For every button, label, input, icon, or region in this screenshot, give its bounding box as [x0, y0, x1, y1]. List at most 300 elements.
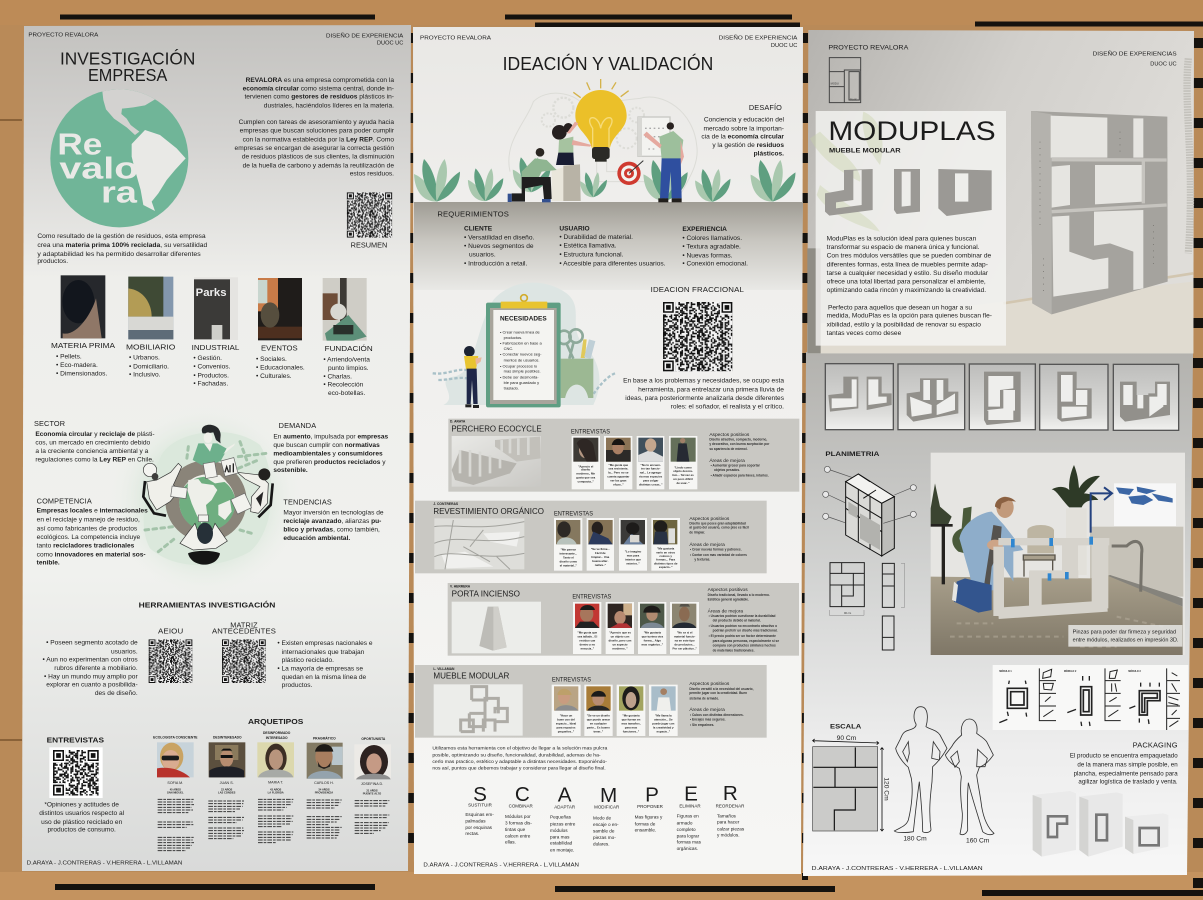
papers: [171, 458, 251, 522]
aspectos: Áreas de mejora: [689, 706, 725, 713]
labels and lists: • Inclusivo.: [129, 372, 161, 379]
globe: [179, 474, 235, 530]
labels and lists: • Pellets.: [56, 354, 82, 361]
demanda: que prefieren productos reciclados y: [273, 459, 386, 466]
M modificar: samble de: [593, 829, 615, 834]
assembly instructions: MÓDULO 1: [999, 670, 1012, 673]
card 2: [584, 685, 613, 736]
desafío: cia de la economía circular: [701, 134, 784, 141]
archetype: desinformado: [257, 731, 294, 843]
card 4: "Lindo como: [674, 465, 692, 469]
description: diferentes formas, esta línea de muebles permite adap-: [827, 261, 988, 268]
card 3: que fueran en: [622, 717, 641, 721]
header: DUOC UC: [771, 43, 797, 49]
furniture module: [998, 542, 1109, 616]
left findings: • Aun no experimentan con otros: [42, 656, 138, 663]
human silhouettes: 160 Cm: [966, 838, 990, 845]
QR resumen: RESUMEN: [351, 240, 387, 249]
card 1: buen uso del: [557, 717, 575, 721]
A adaptar: Pequeñas: [550, 815, 572, 820]
description: medida, ModuPlas es la opción para quienes buscan fle-: [827, 313, 992, 320]
card 2: moderno..": [612, 647, 628, 651]
card 4: "No se si el: [677, 631, 693, 635]
top section: [28, 32, 404, 265]
E eliminar: E: [684, 783, 698, 806]
AEIOU: AEIOU: [158, 626, 183, 635]
aspectos: [689, 681, 754, 727]
card 3: que tuviera otra: [642, 635, 663, 639]
aspectos: permite jugar con la creatividad. Buen: [689, 691, 747, 695]
planimetria heading: PLANIMETRIA: [825, 451, 880, 458]
C combinar: 3 formas dis-: [505, 821, 532, 826]
card 2: "Se ve firme...: [591, 547, 610, 551]
description: ofrece una total libertad para personalizar el ambiente,: [827, 279, 986, 286]
illustration: clipboard: traslado.: [504, 385, 519, 390]
result paragraph: y adaptabilidad les ha permitido desarrollar diferentes: [37, 251, 201, 258]
result paragraph: crea una materia prima 100% reciclada, su versatilidad: [37, 242, 208, 249]
card 3: [619, 518, 647, 571]
aspectos: su apariencia de mármol.: [709, 447, 748, 451]
card 4: distintos tipos de: [654, 561, 678, 565]
arrow to clip detail: [1091, 487, 1112, 533]
paragraph: cerlo mas practico, estético y adaptable a distintas necesidades. Exponiéndo-: [432, 759, 607, 765]
tendencias: Mayor inversión en tecnologías de: [283, 509, 384, 516]
aspectos: • Añadir espacios para llaves, intarios.: [711, 473, 769, 477]
panel: porta incienso: PORTA INCIENSO: [452, 590, 520, 599]
archetype: desinteresado: LAS CONDES: [218, 790, 236, 794]
leaves: [145, 442, 267, 552]
card 4: Por ser plástico..": [672, 647, 698, 651]
panel: revestimiento orgánico: [415, 501, 767, 573]
P proponer: PROPONER: [637, 804, 664, 809]
card 3: funciones..": [623, 729, 640, 733]
heading: HERRAMIENTAS INVESTIGACIÓN: [139, 600, 275, 609]
card 2: un aspecto: [612, 643, 628, 647]
card 1: residuo cae: [579, 639, 596, 643]
A adaptar: en montaje.: [550, 847, 574, 852]
result paragraph: Como resultado de la gestión de residuos, esta empresa: [37, 233, 206, 240]
labels and lists: • Urbanos.: [129, 354, 160, 361]
labels and lists: • Recolección: [323, 382, 364, 389]
archetype: desinteresado: JUAN S.: [220, 781, 234, 785]
scale and packaging: [812, 665, 1188, 872]
M modificar: encaje o en-: [593, 822, 619, 827]
thumbnail 3: [969, 364, 1035, 430]
ideacion fraccional: IDEACION FRACCIONAL: [651, 285, 744, 294]
entrevistas: productos de consumo.: [47, 827, 116, 834]
plants: [414, 157, 795, 202]
header: DISEÑO DE EXPERIENCIAS: [1093, 51, 1177, 58]
intro text: de la huella de carbono y además la reutilización de: [243, 162, 394, 169]
aspectos: Áreas de mejora: [709, 457, 745, 464]
M modificar: MODIFICAR: [594, 805, 620, 810]
card 1: diseño: [581, 468, 591, 472]
requerimientos: • Textura agradable.: [682, 244, 741, 251]
card 3: forma... Algo: [644, 639, 661, 643]
labels and lists: • Dimensionados.: [56, 371, 107, 378]
aspectos: Aspectos positivos: [709, 432, 750, 438]
packaging text: plancha, especialmente pensado para: [1074, 771, 1178, 778]
aspectos: de limpiar.: [689, 530, 705, 534]
intro text: economía circular como sistema central, donde in-: [243, 85, 394, 92]
card 3: nal... Le agrega-: [640, 471, 662, 475]
card 1: sea tallado.. El: [577, 635, 597, 639]
desafío: mercado sobre la importan-: [704, 125, 784, 132]
labels and lists: • Eco-madera.: [56, 362, 98, 369]
radiator pipe: [1112, 542, 1142, 592]
R reordenar: calzar piezas: [717, 826, 745, 831]
E eliminar: ELIMINAR: [679, 804, 701, 809]
white info panel: [810, 111, 1006, 346]
chair: [1023, 525, 1055, 578]
matriz antecedentes: [212, 620, 276, 683]
aspectos: • Sin empalmes.: [690, 723, 714, 727]
photo: eventos: [258, 278, 302, 340]
card 2: buena alter-: [592, 559, 608, 563]
intro text: tervienen como gestores de residuos plásticos in-: [244, 94, 394, 101]
card 3: mas tamaños,: [621, 721, 641, 725]
C combinar: [505, 783, 534, 845]
archetype: desinformado: MARIA T.: [268, 781, 283, 785]
card 2: tener..": [593, 729, 604, 733]
ideacion fraccional: roles: el soñador, el realista y el crítico.: [671, 403, 784, 410]
aspectos: sistema de armado.: [689, 696, 719, 700]
illustration: clipboard: • Ocupar procesos lo: [500, 363, 538, 368]
card 4: [651, 518, 680, 571]
card 3: interior que: [625, 558, 641, 562]
labels and lists: MATERIA PRIMA: [51, 341, 115, 350]
card 2: [606, 602, 634, 654]
R reordenar: y módulos.: [717, 833, 740, 838]
competencia: así como fabricantes de productos: [37, 525, 138, 532]
description: Con tres módulos versátiles que se pueden combinar de: [827, 253, 992, 260]
card 2: [604, 436, 632, 489]
P proponer: formas de: [635, 821, 656, 826]
labels and lists: • Arriendo/venta: [323, 356, 370, 363]
description: optimizando cada rincón y maximizando la creatividad.: [827, 287, 986, 294]
aspectos: Aspectos positivos: [689, 516, 730, 522]
card 2: la... Pero no se: [608, 471, 629, 475]
panel: revestimiento orgánico: J. CONTRERAS: [433, 502, 459, 506]
sector: [34, 419, 155, 464]
photo: assembling the module: [931, 453, 1185, 655]
aspectos: del producto debido al material.: [713, 619, 761, 623]
packaging text: El producto se encuentra empaquetado: [1070, 753, 1178, 760]
person top: [193, 425, 235, 465]
archetype: desinformado: LA FLORIDA: [268, 790, 284, 794]
card 2: diseño, pero con: [609, 639, 632, 643]
illustration: clipboard: mas simple posibles.: [504, 369, 541, 374]
aspectos: compara con productos similares hechos: [713, 644, 776, 648]
logo: Revalora globe: Re: [57, 127, 102, 161]
tendencias: [283, 498, 384, 542]
ideacion fraccional: herramienta, para entrelazar una primera lluvia de: [638, 386, 784, 393]
card 3: "Me gustaría: [622, 713, 640, 717]
human silhouettes: 180 Cm: [903, 835, 927, 842]
card 1: [572, 436, 600, 489]
panel: porta incienso: [448, 583, 799, 656]
E eliminar: [677, 783, 702, 851]
labels and lists: • Convenios.: [193, 364, 231, 371]
card 1: pequeños..": [558, 729, 575, 733]
archetype: desinformado: 43 AÑOS: [270, 786, 282, 791]
card 3: ría mas espacios: [639, 475, 663, 479]
man at board: [643, 122, 684, 202]
card 1: gusta que sea: [576, 476, 596, 480]
demanda: En aumento, impulsada por empresas: [273, 433, 389, 440]
archetype: desinteresado: 22 AÑOS: [221, 786, 233, 791]
aspectos: Aspectos positivos: [689, 681, 730, 687]
card 2: "Me gusta que: [609, 463, 629, 467]
right findings: [277, 640, 373, 689]
card 3: "Lo imagino: [625, 550, 642, 554]
thumbnail 4: [1040, 364, 1108, 430]
labels and lists: EVENTOS: [261, 343, 298, 352]
panel: porta incienso: ENTREVISTAS: [572, 595, 611, 601]
left findings: explorar en cuanto a posibilida-: [46, 682, 138, 689]
right findings: internacionales que trabajan: [282, 649, 365, 656]
photo: [434, 518, 524, 569]
hero photo section: [807, 30, 1194, 353]
labels and lists: • Educacionales.: [256, 365, 305, 372]
competencia: tenible.: [37, 559, 60, 566]
caption: Pinzas para poder dar firmeza y seguridad: [1073, 630, 1176, 636]
requerimientos: EXPERIENCIA: [682, 226, 727, 233]
archetype: oportunista: [354, 737, 391, 833]
paragraph: Utilizamos esta herramienta con el objetivo de llegar a la solución mas pulcra: [432, 745, 608, 751]
desafío: [701, 103, 785, 158]
photo: [452, 602, 541, 653]
intro text: de residuos plásticos de sus clientes, la disminución: [242, 154, 394, 161]
card 4: objeto decora-: [673, 469, 693, 473]
aspectos: [709, 432, 770, 477]
requerimientos: • Colores llamativos.: [682, 235, 742, 242]
intro text: empresas que buscan soluciones para poder cumplir: [240, 128, 395, 135]
header left: PROYECTO REVALORA: [28, 33, 99, 39]
right findings: • La mayoría de empresas se: [277, 665, 363, 672]
AEIOU: [149, 626, 192, 683]
card 1: Tanto el: [563, 555, 574, 559]
right findings: productos.: [282, 682, 313, 689]
caption: [1068, 625, 1182, 647]
person right: [237, 468, 273, 517]
labels and lists: • Sociales.: [256, 356, 287, 363]
ideacion fraccional: En base a los problemas y necesidades, se ocupo esta: [623, 378, 784, 385]
panel: porta incienso: V. HERRERA: [450, 584, 471, 588]
card 4: puede jugar con: [652, 721, 675, 725]
aspectos: Diseño versátil a la necesidad del usuario,: [689, 687, 754, 691]
escala: 90 Cm: [837, 735, 857, 742]
R reordenar: REORDENAR: [716, 804, 745, 809]
archetype: pragmático: PRAGMÁTICO: [313, 735, 336, 740]
photo: mobiliario: [128, 277, 173, 339]
console: [552, 164, 581, 201]
labels and lists: FUNDACIÓN: [325, 344, 373, 353]
illustration: team and light bulb: [414, 79, 795, 202]
blue clips: [1011, 537, 1093, 581]
card 3: mas para: [627, 554, 640, 558]
archetype: ecologista: SAN MIGUEL: [167, 790, 184, 794]
white info panel: MUEBLE MODULAR: [829, 148, 902, 154]
card 4: formas... Para: [656, 558, 676, 562]
left findings: rubros diferente a mobiliario.: [54, 665, 138, 672]
header: DUOC UC: [1150, 62, 1177, 68]
header: PROYECTO REVALORA: [420, 36, 491, 42]
requerimientos: USUARIO: [559, 225, 590, 232]
card 2: nativa..": [595, 563, 607, 567]
intro text: [235, 77, 395, 178]
card 2: "Aprecio que es: [609, 631, 631, 635]
aspectos: de materiales tradicionales.: [713, 648, 755, 652]
A adaptar: para mas: [550, 835, 570, 840]
card 3: [617, 685, 645, 736]
labels and lists: • Productos.: [193, 372, 229, 379]
card 4: atención... Se: [654, 717, 673, 721]
photo: materia prima: [61, 275, 105, 338]
card 2: que puedo armar: [587, 717, 611, 721]
thumbnail 5: [1113, 364, 1179, 430]
arquetipos heading: ARQUETIPOS: [248, 717, 303, 726]
illustration: clipboard: • Conectar nuevos seg-: [500, 352, 542, 357]
card 1: "Me parece: [561, 548, 576, 552]
card 4: na en este tipo: [675, 639, 695, 643]
P proponer: Mas figuras y: [635, 815, 663, 820]
packaging text: [1070, 741, 1178, 785]
card 4: "Me gustaría: [657, 547, 675, 551]
card 2: cuenta aguantar: [607, 475, 630, 479]
demanda: DEMANDA: [279, 421, 316, 430]
left findings: • Hay un mundo muy amplio por: [44, 673, 138, 680]
archetype: desinformado: DESINFORMADO: [263, 731, 291, 735]
archetype: pragmático: 34 AÑOS: [318, 786, 330, 791]
configurations and planimetry: [823, 364, 1179, 650]
title: INVESTIGACIÓN: [60, 49, 195, 69]
card 3: [637, 436, 664, 489]
aspectos: • Aumentar grosor para soportar: [711, 464, 761, 468]
description: transformar su espacio de manera única y funcional.: [827, 244, 980, 251]
poster 1: investigación empresa: [22, 25, 411, 871]
requerimientos: CLIENTE: [464, 226, 493, 233]
R reordenar: para hacer: [717, 820, 740, 825]
plan views: [829, 563, 905, 650]
card 1: [554, 518, 582, 571]
competencia: [37, 496, 148, 566]
shelf render: [1031, 111, 1168, 314]
requerimientos: • Accesible para diferentes usuarios.: [559, 260, 666, 267]
A adaptar: estabilidad: [550, 841, 573, 846]
entrevistas: uso de plástico reciclado en: [41, 819, 123, 826]
M modificar: piezas mo-: [593, 835, 616, 840]
panel: mueble modular: [415, 665, 767, 738]
card 3: para colgar: [643, 479, 659, 483]
aspectos: Diseño que posee gran adaptabilidad: [689, 521, 746, 525]
paragraph: [432, 745, 608, 772]
competencia: ecológicos. La competencia incluye: [37, 534, 140, 541]
archetype: desinformado: INTERESADO: [266, 736, 288, 740]
requerimientos: • Introducción a retail.: [464, 260, 528, 267]
ideacion fraccional: ideas, para posteriormente analizarla desde diferentes: [625, 395, 785, 402]
labels and lists: • Culturales.: [256, 373, 292, 380]
pedestal and plant: [1052, 465, 1100, 575]
C combinar: tintas que: [505, 827, 526, 832]
card 1: dentro y no: [580, 643, 595, 647]
illustration: clipboard: • Crear nueva línea de: [500, 329, 540, 334]
escala: ESCALA: [830, 724, 862, 731]
card 4: espacio..": [657, 729, 671, 733]
requerimientos: REQUERIMIENTOS: [437, 209, 509, 218]
aspectos: Aspectos positivos: [708, 587, 748, 593]
matriz antecedentes: ANTECEDENTES: [212, 627, 276, 636]
intro text: con la normativa establecida por la Ley REP. Como: [243, 136, 394, 143]
R reordenar: R: [723, 782, 738, 805]
logo: Revalora globe: valo: [59, 152, 138, 186]
desafío: y la gestión de residuos: [712, 142, 784, 149]
archetype: oportunista: JOSEFINA D.: [361, 782, 383, 786]
aspectos: Estética general agradable.: [708, 598, 749, 602]
right findings: • Existen empresas nacionales e: [277, 640, 373, 647]
ideacion fraccional: [623, 285, 785, 410]
panel: mueble modular: ENTREVISTAS: [552, 677, 591, 683]
person bottom: [180, 523, 227, 565]
A adaptar: ADAPTAR: [554, 804, 576, 809]
round table illustration: [108, 403, 302, 597]
callouts: [823, 466, 916, 523]
panel: perchero ecocycle: PERCHERO ECOCYCLE: [451, 424, 542, 433]
labels and lists: punto limpios.: [328, 365, 369, 372]
assembly instructions: [993, 665, 1188, 730]
room background: [807, 30, 1194, 353]
illustration: clipboard: productos.: [504, 335, 522, 340]
competencia: como innovadores en material sos-: [37, 551, 146, 558]
header right: DISEÑO DE EXPERIENCIA: [326, 32, 404, 39]
card 1: "Aprecio el: [578, 464, 593, 468]
packaging text: agilizar logística de traslado y venta.: [1078, 778, 1178, 785]
card 1: diseño como: [560, 559, 577, 563]
A adaptar: piezas entre: [550, 821, 576, 826]
photo: [434, 684, 523, 736]
left findings: des de diseño.: [95, 690, 138, 697]
A adaptar: módulos: [550, 828, 568, 833]
panel: perchero ecocycle: D. ARAYA: [450, 420, 466, 424]
card 3: [638, 602, 666, 654]
poster 3: moduplas: [803, 30, 1194, 876]
matriz antecedentes: MATRIZ: [230, 620, 258, 629]
logo: Revalora globe: [50, 87, 193, 227]
title: [60, 49, 195, 85]
illustration: clipboard: NECESIDADES: [500, 317, 547, 323]
A adaptar: [550, 784, 576, 852]
archetype: ecologista: ECOLOGISTA CONSCIENTE: [153, 736, 198, 740]
card 2: Fácil de: [595, 551, 606, 555]
plan views: 90 cm: [844, 611, 852, 615]
header: [420, 35, 798, 49]
person: [952, 497, 1023, 613]
logo: Revalora globe: ra: [101, 176, 138, 210]
aspectos: podrían preferir un diseño más tradicional.: [713, 629, 778, 633]
card 4: la creatividad y: [653, 725, 674, 729]
labels and lists: • Charlas.: [323, 373, 352, 380]
card 4: [670, 602, 699, 654]
QR resumen: [347, 192, 392, 249]
card 1: para espacios: [556, 725, 576, 729]
necesidades and ideación: [433, 283, 799, 492]
archetype: oportunista: OPORTUNISTA: [361, 737, 386, 741]
card 3: distintas cosas..": [639, 483, 663, 487]
labels and lists: MOBILIARIO: [126, 342, 176, 351]
card 4: material funcio-: [674, 635, 695, 639]
panel: perchero ecocycle: ENTREVISTAS: [571, 429, 610, 435]
sector: Economía circular y reciclaje de plásti-: [35, 431, 155, 438]
